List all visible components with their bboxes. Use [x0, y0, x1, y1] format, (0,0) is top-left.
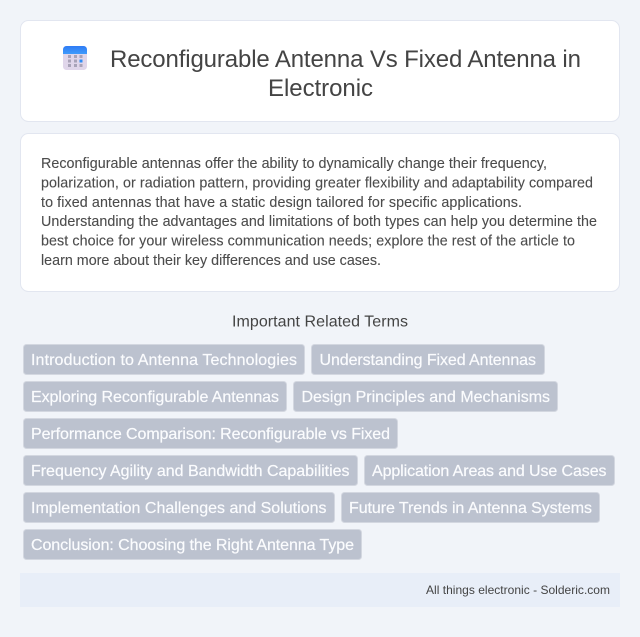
tag: future trends: [342, 492, 600, 522]
tag: application areas: Application Areas and Use Cases: [372, 463, 606, 480]
tag: fixed antennas: [312, 344, 544, 374]
tag: frequency agility: [24, 456, 358, 486]
text block: introduction: [41, 156, 597, 269]
tag: design principles: Design Principles and Mechanisms: [302, 389, 550, 406]
tag: introduction: [24, 344, 304, 374]
tag: introduction: Introduction to Antenna Technologies: [31, 352, 297, 369]
tag: performance comparison: Performance Comparison: Reconfigurable vs Fixed: [31, 426, 390, 443]
text block: introduction: polarization, or radiation pattern, providing greater flexibility and adaptability compared: [41, 175, 593, 191]
tag: reconfigurable antennas: Exploring Reconfigurable Antennas: [31, 389, 279, 406]
text block: introduction: best choice for your wireless communication needs; explore the rest of the article to: [41, 234, 575, 250]
panel: introduction card: [20, 134, 620, 292]
panel: related terms tags: [24, 344, 614, 560]
footer: All things electronic - Solderic.com: [426, 583, 610, 597]
title: [110, 46, 581, 102]
text block: introduction: Reconfigurable antennas offer the ability to dynamically change their frequency,: [41, 156, 547, 172]
icon: calendar: [63, 46, 87, 70]
text block: introduction: to fixed antennas that have a static design tailored for specific applications.: [41, 195, 522, 211]
tag: performance comparison: [24, 418, 398, 448]
panel: title card: [20, 20, 620, 122]
heading: important related terms: Important Related Terms: [232, 314, 408, 330]
tag: conclusion: Conclusion: Choosing the Right Antenna Type: [31, 537, 354, 554]
text block: introduction: learn more about their key differences and use cases.: [41, 253, 381, 269]
tag: frequency agility: Frequency Agility and Bandwidth Capabilities: [31, 463, 350, 480]
tag: design principles: [294, 382, 558, 412]
title: Reconfigurable Antenna Vs Fixed Antenna in: [110, 46, 581, 73]
tag: implementation challenges: Implementation Challenges and Solutions: [31, 500, 326, 517]
tag: reconfigurable antennas: [24, 382, 286, 412]
tag: conclusion: [24, 530, 362, 560]
footer: [20, 573, 620, 607]
tag: fixed antennas: Understanding Fixed Antennas: [320, 352, 536, 369]
tag: implementation challenges: [24, 492, 334, 522]
title: Electronic: [268, 75, 373, 102]
tag: application areas: [364, 456, 614, 486]
tag: future trends: Future Trends in Antenna Systems: [349, 500, 592, 517]
text block: introduction: Understanding the advantages and limitations of both types can help you determine the: [41, 214, 597, 230]
